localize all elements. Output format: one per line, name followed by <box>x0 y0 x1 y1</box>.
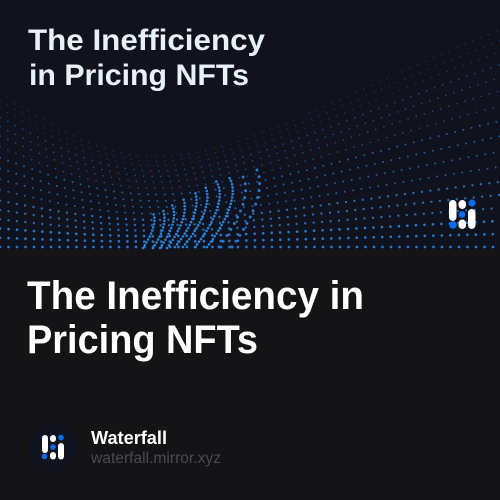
heading: main title: The Inefficiency in <box>27 274 364 318</box>
panel: lower card background <box>0 250 500 500</box>
chart: bright wave ridge <box>143 176 233 248</box>
icon: banner logo <box>449 199 476 229</box>
heading: banner title <box>28 24 265 92</box>
heading: main title: Pricing NFTs <box>27 318 258 362</box>
icon: publisher avatar logo <box>29 423 77 471</box>
panel: cover banner background <box>0 0 500 250</box>
text: publisher url: waterfall.mirror.xyz <box>90 450 221 467</box>
chart: dotted wave surface <box>0 30 500 247</box>
text: publisher name: Waterfall <box>91 428 167 448</box>
chart: fan of curved dot lines beside ridge <box>219 165 260 247</box>
heading: banner title: in Pricing NFTs <box>29 59 249 92</box>
heading: main title <box>27 274 364 362</box>
heading: banner title: The Inefficiency <box>28 24 265 57</box>
